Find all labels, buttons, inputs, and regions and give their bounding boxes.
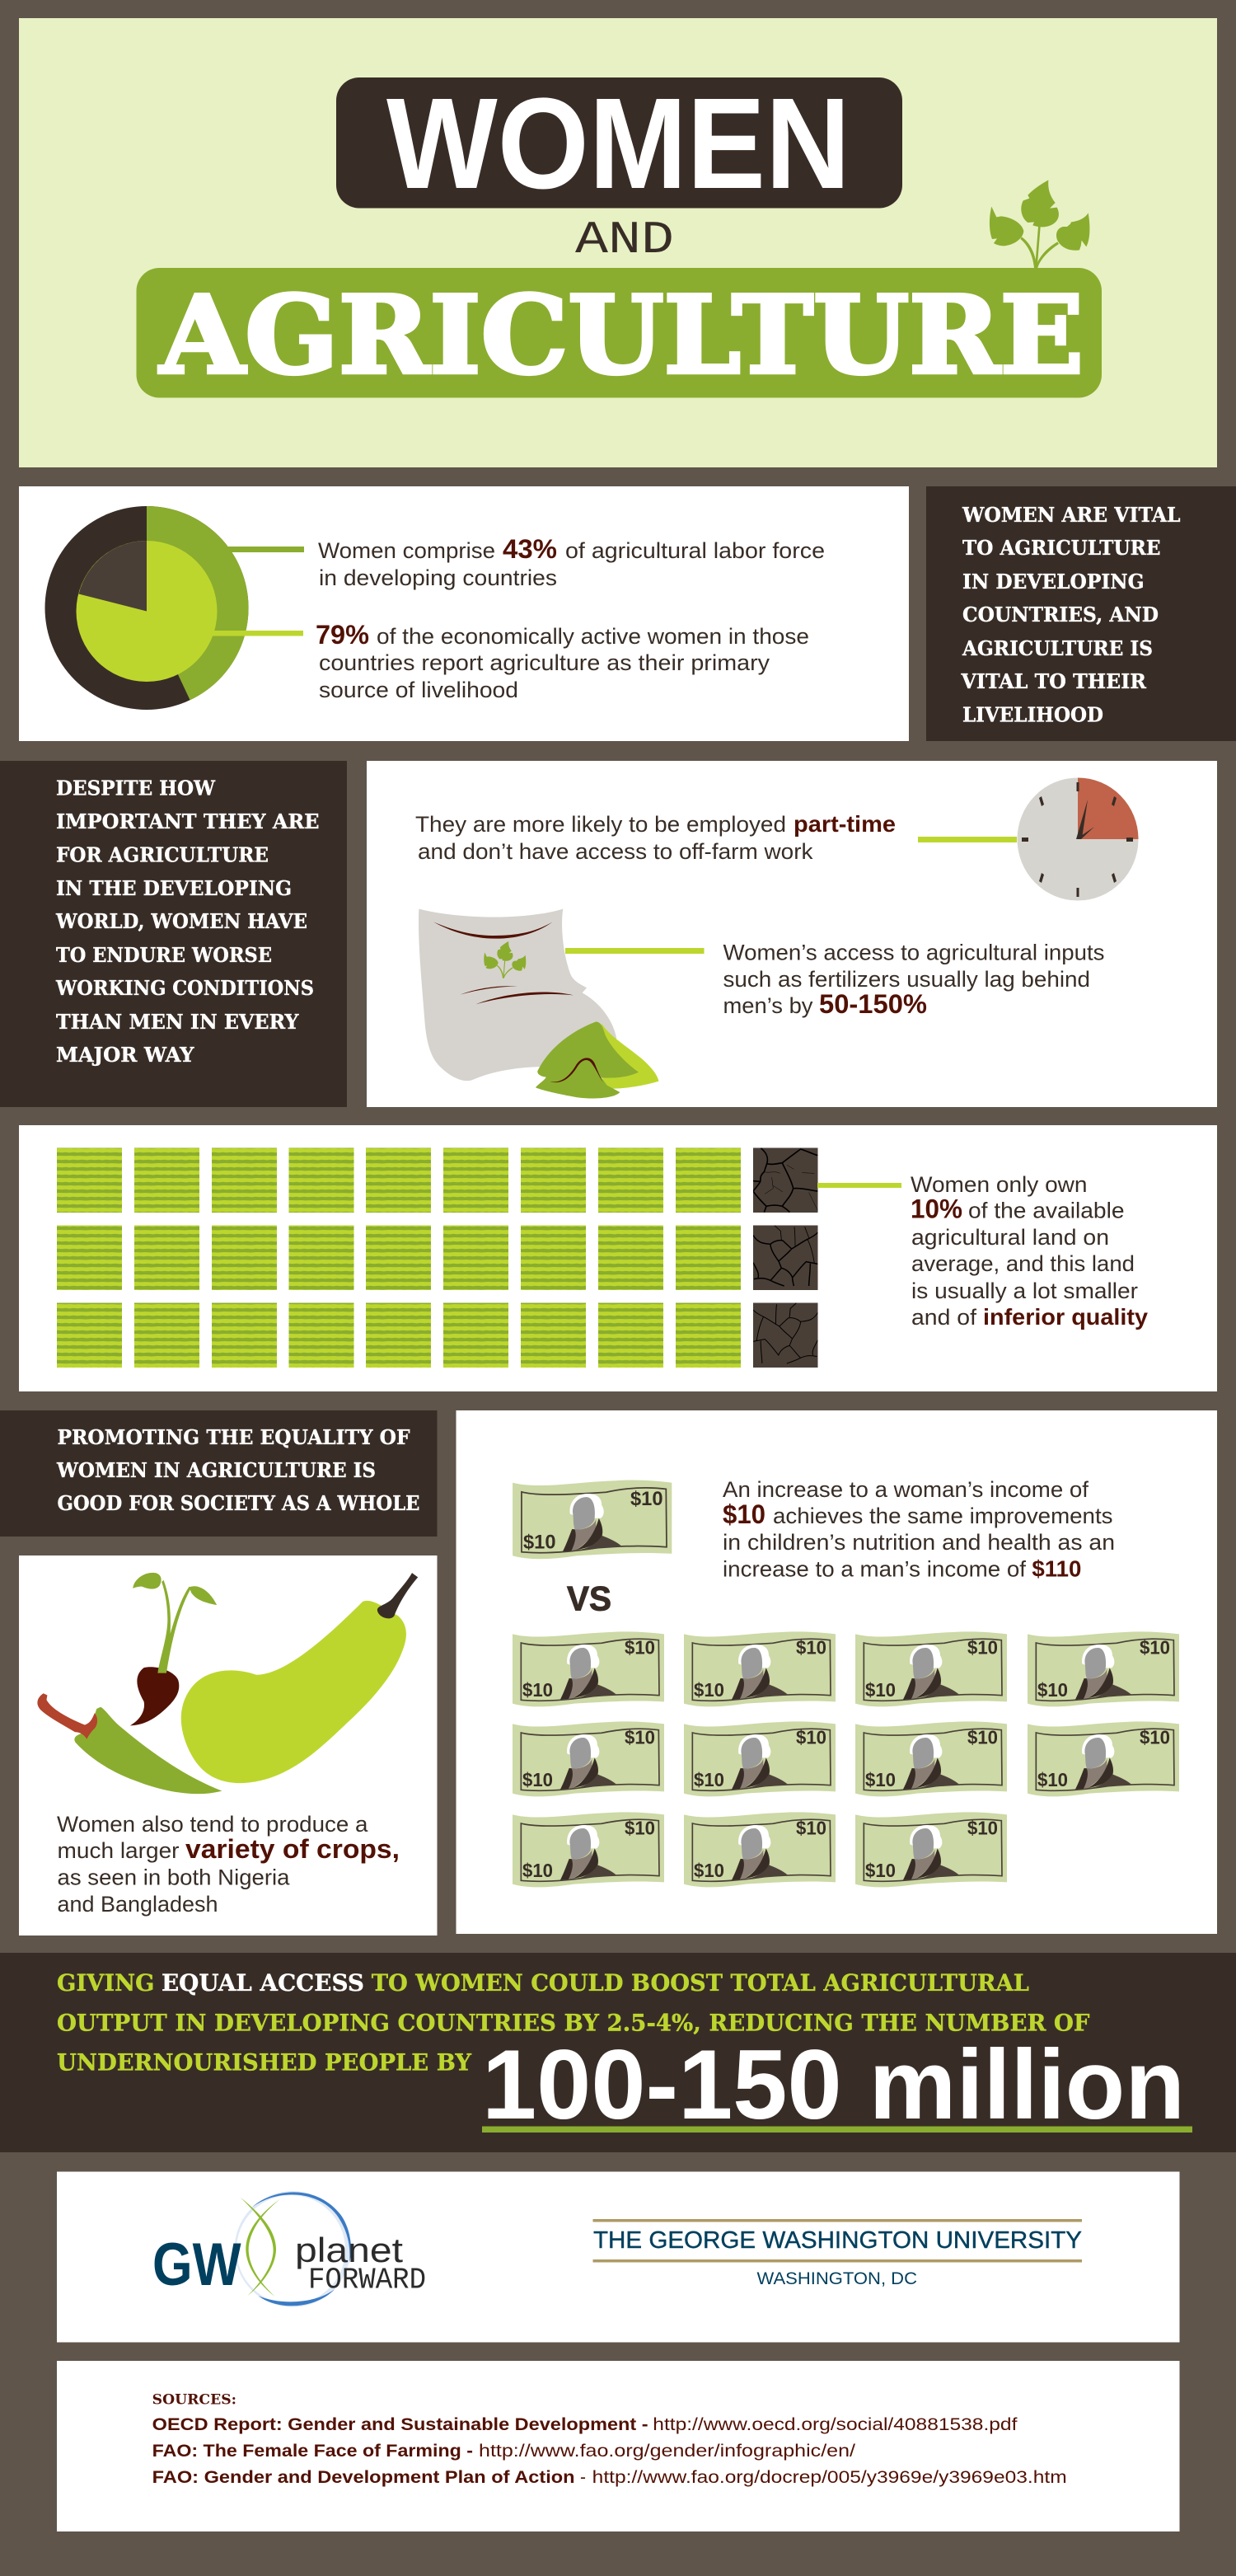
text: variety of crops: and Bangladesh — [58, 1892, 218, 1917]
panel: income comparison — [456, 1410, 1217, 1934]
connector line — [213, 631, 303, 636]
panel: conclusion band — [0, 1953, 1236, 2152]
panel: part-time and inputs — [367, 761, 1217, 1107]
chart: donut pie 43% and 79% — [44, 506, 249, 710]
text: variety of crops — [57, 1812, 400, 1917]
icon group: eleven $10 bills: $10 — [967, 1818, 998, 1839]
text: 43% of labor force: 43% — [503, 534, 557, 564]
text: equal access statement: TO WOMEN COULD BOOST TOTAL AGRICULTURAL — [372, 1969, 1029, 1997]
panel: women are vital: TO AGRICULTURE — [962, 536, 1160, 560]
panel: logos — [57, 2171, 1180, 2343]
text: income comparison — [723, 1477, 1115, 1581]
panel: women are vital: COUNTRIES, AND — [962, 603, 1159, 626]
title box: WOMEN: WOMEN — [386, 72, 850, 216]
text: 79% of women: source of livelihood — [319, 678, 518, 702]
text: equal access statement: OUTPUT IN DEVELOPING COUNTRIES BY 2.5-4%, REDUCING THE NUMBER OF — [57, 2009, 1090, 2036]
logo: The George Washington University: THE GEORGE WASHINGTON UNIVERSITY — [593, 2227, 1082, 2254]
text: women own 10%: of the available — [968, 1199, 1124, 1223]
text: 79% of women: 79% — [316, 620, 369, 650]
text: source 1 — [152, 2415, 1018, 2434]
panel: sources — [57, 2361, 1180, 2531]
text: 79% of women: of the economically active women in those — [377, 624, 809, 649]
big number: 100-150 million: 100-150 million — [482, 2029, 1185, 2140]
panel: variety of crops — [19, 1555, 437, 1936]
icon: crops — [37, 1573, 418, 1794]
text: part-time: They are more likely to be employed — [415, 812, 786, 837]
text: variety of crops: variety of crops, — [185, 1834, 400, 1864]
text: equal access statement: UNDERNOURISHED PEOPLE BY — [57, 2049, 472, 2076]
label: VS: VS — [567, 1579, 611, 1618]
text: women own 10%: is usually a lot smaller — [911, 1279, 1138, 1303]
logo: GW planet forward — [152, 2191, 426, 2307]
connector line — [565, 948, 704, 954]
text: 43% of labor force: in developing countries — [319, 565, 557, 590]
text: source 2: FAO: The Female Face of Farming - — [152, 2442, 473, 2461]
panel: worse working conditions: FOR AGRICULTURE — [56, 843, 269, 867]
icon group: eleven $10 bills: $10 — [522, 1679, 553, 1701]
icon group: eleven $10 bills: $10 — [522, 1769, 553, 1790]
panel: land ownership — [19, 1125, 1217, 1391]
connector line — [817, 1183, 901, 1188]
icon group: eleven $10 bills: $10 — [865, 1679, 896, 1701]
panel: women are vital — [926, 486, 1236, 741]
panel: promoting equality — [0, 1410, 437, 1537]
text: women own 10%: Women only own — [911, 1172, 1088, 1197]
icon group: eleven $10 bills: $10 — [796, 1818, 826, 1839]
text: income comparison: in children’s nutrition and health as an — [723, 1530, 1115, 1555]
text: source 3: FAO: Gender and Development Plan of Action — [152, 2468, 575, 2487]
panel: worse working conditions: TO ENDURE WORSE — [56, 943, 272, 967]
icon: sprout — [990, 180, 1089, 268]
text: income comparison: achieves the same improvements — [773, 1504, 1112, 1528]
icon group: eleven $10 bills: $10 — [967, 1637, 998, 1659]
icon group: eleven $10 bills: $10 — [865, 1769, 896, 1790]
icon group: eleven $10 bills: $10 — [796, 1727, 826, 1748]
text: source 2 — [152, 2442, 855, 2461]
text: inputs lag 50-150%: 50-150% — [819, 989, 927, 1019]
text: women own 10%: agricultural land on — [911, 1225, 1109, 1250]
icon group: eleven $10 bills: $10 — [796, 1637, 826, 1659]
text: equal access statement — [57, 1969, 1090, 2076]
text: source 3: http://www.fao.org/docrep/005/y3969e/y3969e03.htm — [592, 2468, 1067, 2487]
icon: large $10 bill: $10 — [630, 1488, 662, 1510]
text: source 3 — [152, 2468, 1067, 2487]
icon group: eleven $10 bills: $10 — [967, 1727, 998, 1748]
panel: promoting equality: WOMEN IN AGRICULTURE IS — [56, 1458, 376, 1482]
title box: AGRICULTURE: AGRICULTURE — [158, 272, 1084, 398]
text: women own 10% — [911, 1172, 1148, 1330]
text: source 1: OECD Report: Gender and Sustainable Development - — [152, 2415, 648, 2434]
text: part-time: and don’t have access to off-farm work — [418, 839, 813, 864]
text: inputs lag 50-150%: men’s by — [723, 993, 813, 1018]
icon group: eleven $10 bills: $10 — [1140, 1637, 1170, 1659]
panel: worse working conditions: WORKING CONDITIONS — [55, 976, 314, 1000]
icon group: eleven $10 bills: $10 — [625, 1727, 655, 1748]
panel: worse working conditions: IN THE DEVELOPING — [56, 876, 292, 900]
panel: worse working conditions: IMPORTANT THEY ARE — [56, 809, 320, 833]
icon group: eleven $10 bills: $10 — [1037, 1679, 1068, 1701]
text: source 2: http://www.fao.org/gender/infographic/en/ — [479, 2442, 855, 2461]
panel: promoting equality: PROMOTING THE EQUALITY OF — [58, 1425, 410, 1449]
panel: worse working conditions: MAJOR WAY — [56, 1043, 194, 1067]
icon: large $10 bill — [513, 1480, 672, 1559]
panel: women are vital: WOMEN ARE VITAL — [962, 503, 1181, 527]
logo: GW planet forward: FORWARD — [308, 2264, 426, 2297]
text: 43% of labor force — [318, 534, 825, 590]
icon group: eleven $10 bills: $10 — [625, 1818, 655, 1839]
text: income comparison: $110 — [1032, 1556, 1081, 1581]
text: women own 10%: inferior quality — [983, 1304, 1148, 1330]
icon group: eleven $10 bills: $10 — [1140, 1727, 1170, 1748]
panel: promoting equality: GOOD FOR SOCIETY AS A WHOLE — [58, 1491, 420, 1515]
icon group: eleven $10 bills: $10 — [694, 1679, 724, 1701]
panel: worse working conditions: WORLD, WOMEN HAVE — [55, 909, 307, 933]
text: 43% of labor force: of agricultural labor force — [565, 538, 825, 563]
text: 43% of labor force: Women comprise — [318, 538, 495, 563]
icon group: eleven $10 bills: $10 — [694, 1860, 724, 1881]
text: women own 10%: average, and this land — [911, 1251, 1135, 1276]
panel: title — [19, 18, 1217, 467]
icon group: eleven $10 bills: $10 — [522, 1860, 553, 1881]
connector line — [918, 837, 1017, 842]
logo: GW planet forward: GW — [152, 2231, 241, 2298]
text: women own 10%: and of — [911, 1305, 977, 1330]
text: part-time: part-time — [794, 811, 896, 837]
text: 79% of women: countries report agriculture as their primary — [319, 650, 770, 675]
connector line — [228, 547, 304, 552]
text: women own 10%: 10% — [911, 1194, 962, 1224]
icon group: eleven $10 bills: $10 — [865, 1860, 896, 1881]
text: variety of crops: much larger — [58, 1838, 180, 1863]
icon group: eleven $10 bills: $10 — [625, 1637, 655, 1659]
icon: large $10 bill: $10 — [523, 1532, 555, 1554]
panel: women are vital: LIVELIHOOD — [962, 702, 1103, 727]
icon group: eleven $10 bills: $10 — [1037, 1769, 1068, 1790]
panel: women are vital: VITAL TO THEIR — [961, 669, 1147, 693]
text: part-time — [415, 811, 896, 864]
text: source 1: http://www.oecd.org/social/40881538.pdf — [653, 2415, 1018, 2434]
icon: fertilizer bag — [419, 909, 658, 1099]
logo: The George Washington University — [593, 2219, 1082, 2288]
text: inputs lag 50-150%: Women’s access to agricultural inputs — [723, 940, 1104, 964]
text: equal access statement: EQUAL ACCESS — [162, 1969, 364, 1997]
panel: worse working conditions — [0, 761, 347, 1107]
icon: clock with red quarter — [1017, 778, 1139, 900]
text: inputs lag 50-150% — [723, 940, 1104, 1019]
text: variety of crops: Women also tend to produce a — [57, 1812, 369, 1837]
panel: worse working conditions: THAN MEN IN EVERY — [56, 1010, 299, 1034]
title word: AND: AND — [575, 213, 674, 266]
chart: land tiles 90% farmed, 10% cracked — [57, 1147, 818, 1368]
logo: GW planet forward: planet — [295, 2231, 403, 2269]
logo: The George Washington University: WASHINGTON, DC — [756, 2269, 917, 2288]
icon group: eleven $10 bills: $10 — [694, 1769, 724, 1790]
text: income comparison: increase to a man’s income of — [723, 1556, 1027, 1581]
panel: labor force stats — [19, 486, 909, 741]
panel: women are vital: IN DEVELOPING — [962, 570, 1144, 594]
panel: worse working conditions: DESPITE HOW — [56, 777, 216, 800]
icon group: eleven $10 bills — [513, 1631, 1179, 1887]
panel: women are vital: AGRICULTURE IS — [962, 636, 1153, 660]
underline — [482, 2127, 1192, 2133]
heading: sources: SOURCES: — [152, 2392, 236, 2409]
text: equal access statement: GIVING — [57, 1969, 155, 1997]
text: source 3: - — [580, 2468, 586, 2487]
text: variety of crops: as seen in both Nigeria — [58, 1865, 291, 1890]
text: income comparison: $10 — [723, 1499, 765, 1529]
text: 79% of women — [316, 620, 809, 702]
text: inputs lag 50-150%: such as fertilizers usually lag behind — [723, 967, 1090, 992]
text: income comparison: An increase to a woman’s income of — [723, 1477, 1089, 1502]
